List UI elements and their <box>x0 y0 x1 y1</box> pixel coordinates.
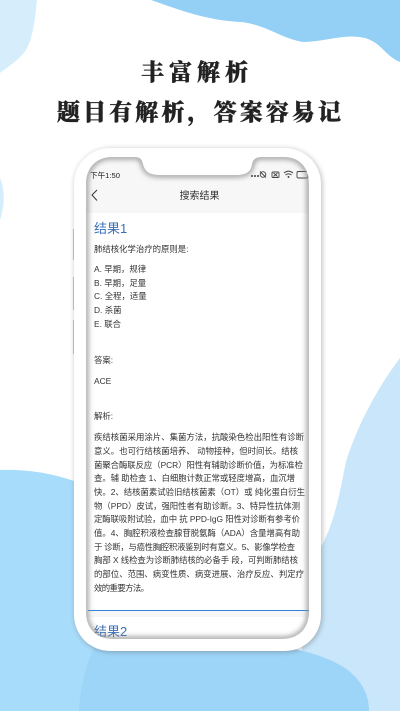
options: E. 联合 <box>94 319 122 329</box>
answer value: ACE <box>94 376 112 386</box>
background: right light shape <box>300 358 400 711</box>
phone side buttons <box>72 229 74 354</box>
analysis paragraph: 菌聚合酶联反应（PCR）阳性有辅助诊断价值，为标准检 <box>94 460 304 470</box>
subtitle: 题目有解析，答案容易记 <box>57 99 341 127</box>
options: B. 早期，足量 <box>94 278 146 288</box>
background: bottom centre shape <box>79 640 369 711</box>
question: 肺结核化学治疗的原则是: <box>94 244 188 254</box>
background: bottom left shape <box>0 470 300 711</box>
analysis paragraph: 定酶联吸附试验，血中 抗 PPD-IgG 阳性对诊断有参考价 <box>94 514 301 524</box>
analysis paragraph: 疾结核菌采用涂片、集菌方法，抗酸染色检出阳性有诊断 <box>94 432 305 442</box>
title: 丰富解析 <box>141 59 253 85</box>
analysis paragraph: 于 诊断，与癌性胸腔积液鉴别时有意义。5、影像学检查 <box>94 542 296 552</box>
analysis paragraph: 快。2、结核菌素试验旧结核菌素（OT）或 纯化蛋白衍生 <box>94 487 305 497</box>
options <box>94 264 147 329</box>
analysis paragraph: 胸部 X 线检查为诊断肺结核的必备手 段，可判断肺结核 <box>94 555 299 565</box>
analysis paragraph: 效的重要方法。 <box>94 583 149 593</box>
result 1 heading: 结果1 <box>94 221 127 236</box>
nav title: 搜索结果 <box>180 189 220 202</box>
analysis paragraph: 值。4、胸腔积液检查腺苷脱氨酶（ADA）含量增高有助 <box>94 528 300 538</box>
analysis paragraph: 意义。也可行结核菌培养、 动物接种，但时间长。结核 <box>94 446 299 456</box>
answer label: 答案: <box>94 355 113 365</box>
status icons <box>251 171 308 178</box>
screen inner shadow <box>86 157 309 639</box>
analysis paragraph <box>94 432 305 593</box>
navigation bar <box>86 157 309 213</box>
status time: 下午1:50 <box>90 170 120 180</box>
back arrow <box>92 190 97 200</box>
background: left bulge <box>0 178 4 220</box>
phone shadow <box>75 149 322 652</box>
options: D. 杀菌 <box>94 305 121 315</box>
analysis paragraph: 物（PPD）皮试，强阳性者有助诊断。3、特异性抗体测 <box>94 501 300 511</box>
background: top left shape <box>0 0 37 73</box>
phone screen <box>86 157 309 639</box>
result 2 heading: 结果2 <box>94 624 127 639</box>
options: A. 早期，规律 <box>94 264 147 274</box>
background: top right shape <box>151 0 400 62</box>
phone body <box>74 148 321 651</box>
options: C. 全程，适量 <box>94 291 147 301</box>
analysis paragraph: 的部位、范围、病变性质、病变进展、治疗反应、判定疗 <box>94 569 305 579</box>
analysis label: 解析: <box>94 411 113 421</box>
result divider <box>88 610 309 611</box>
analysis paragraph: 查。辅 助检查 1、白细胞计数正常或轻度增高，血沉增 <box>94 473 295 483</box>
